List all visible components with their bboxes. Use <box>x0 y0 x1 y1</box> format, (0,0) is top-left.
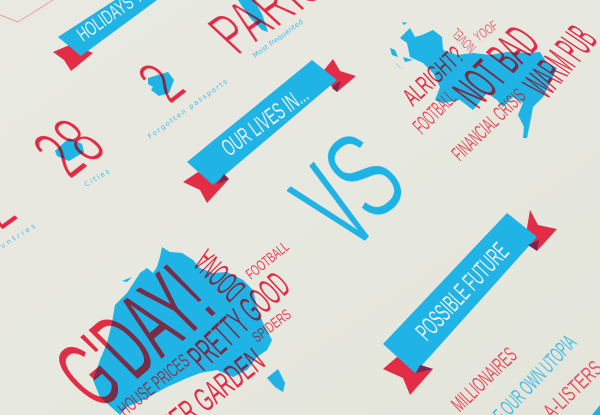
VS heading: V <box>266 143 401 272</box>
Australia word cloud: SPIDERS <box>249 306 295 346</box>
UK word cloud: NOVEL <box>448 25 479 56</box>
stat: cities: 28 <box>14 104 123 191</box>
future list: MILLIONAIRES <box>446 342 522 415</box>
UK word cloud: FINANCIAL CRISIS <box>447 84 530 166</box>
UK word cloud: ALRIGHT? <box>397 40 470 111</box>
Australia word cloud: DOONA <box>187 242 253 308</box>
banner: holidays <box>53 0 164 71</box>
map: Australia <box>93 247 285 415</box>
Australia word cloud: FOOTBALL <box>243 238 292 283</box>
UK word cloud: YOOF <box>471 17 500 44</box>
Australia word cloud: PRETTY GOOD <box>180 265 298 379</box>
banner: our lives in <box>183 59 356 203</box>
stat: countries <box>0 176 37 258</box>
stat: Paris most frequented: Most frequented <box>251 18 305 60</box>
map: UK <box>390 22 557 138</box>
banner: possible future <box>383 210 557 395</box>
stat: cities <box>14 104 123 191</box>
icons under the figures <box>55 0 268 161</box>
UK word cloud: FOOTBALL <box>408 86 461 139</box>
Australia word cloud <box>34 238 298 415</box>
banner: possible future: POSSIBLE FUTURE <box>409 236 515 346</box>
stat: forgotten passports: Forgotten passports <box>146 78 229 141</box>
stat: forgotten passports: 2 <box>121 51 201 115</box>
future list <box>446 330 600 415</box>
stat: forgotten passports <box>121 51 229 141</box>
VS heading: S <box>299 106 430 246</box>
banner: our lives in: OUR LIVES IN... <box>217 81 313 162</box>
thin pink outline top left <box>0 0 53 22</box>
stat: cities: Cities <box>83 167 111 189</box>
